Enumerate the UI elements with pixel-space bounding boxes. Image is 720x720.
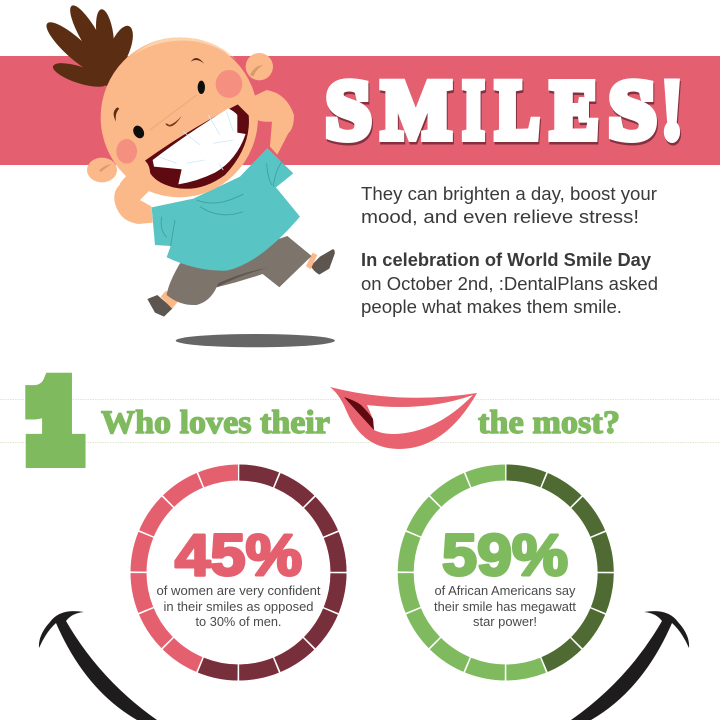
caption: in their smiles as opposed	[164, 600, 314, 614]
intro paragraph: mood, and even relieve stress!	[361, 207, 639, 227]
ring segments	[138, 472, 338, 672]
title: S	[326, 64, 371, 156]
caption	[156, 584, 321, 629]
head highlight	[133, 37, 237, 60]
ring: 59% African Americans	[406, 472, 606, 672]
ring: 45% women	[138, 472, 338, 672]
title: I	[463, 64, 484, 156]
title: E	[552, 66, 599, 158]
teeth	[153, 108, 246, 184]
title: E	[551, 64, 598, 156]
caption	[434, 584, 577, 629]
nose	[150, 95, 197, 130]
tooth lines	[158, 112, 233, 170]
hair	[41, 1, 138, 92]
intro paragraph: on October 2nd, :DentalPlans asked	[361, 274, 658, 294]
intro paragraph	[361, 184, 658, 317]
section heading	[101, 405, 620, 441]
boy character	[41, 1, 335, 347]
left ear	[87, 158, 117, 182]
mouth	[145, 102, 249, 189]
caption: star power!	[473, 615, 537, 629]
title	[326, 64, 683, 158]
shirt creases	[161, 160, 283, 246]
front sock	[161, 291, 178, 309]
eyebrows	[114, 58, 204, 122]
caption: of women are very confident	[156, 584, 321, 598]
title: I	[464, 66, 485, 158]
back foot	[311, 249, 335, 275]
percentage: 59%	[442, 523, 568, 588]
left hand	[120, 161, 150, 200]
section heading: Who loves their	[101, 405, 330, 441]
title: S	[327, 66, 372, 158]
section number: 1	[28, 365, 80, 490]
caption: their smile has megawatt	[434, 600, 577, 614]
back sock	[306, 253, 317, 269]
left arm	[114, 167, 157, 224]
big smile right end	[571, 611, 689, 720]
eyes	[198, 81, 205, 94]
right hand	[237, 90, 294, 155]
title: M	[383, 66, 452, 158]
shadow	[176, 334, 335, 347]
title: L	[496, 64, 539, 156]
header band	[0, 56, 720, 165]
caption: of African Americans say	[434, 584, 576, 598]
title: S	[610, 66, 657, 158]
title: L	[497, 66, 540, 158]
intro paragraph: people what makes them smile.	[361, 297, 622, 317]
ring segments	[406, 472, 606, 672]
title: M	[382, 64, 451, 156]
title: !	[662, 64, 682, 156]
head	[101, 37, 258, 197]
section heading: the most?	[478, 405, 620, 441]
intro paragraph: In celebration of World Smile Day	[361, 250, 651, 270]
big smile left end	[39, 611, 157, 720]
trousers	[167, 236, 312, 305]
cheeks	[216, 70, 242, 98]
shirt	[152, 148, 300, 271]
right ear	[246, 53, 273, 80]
caption: to 30% of men.	[196, 615, 282, 629]
percentage: 45%	[175, 523, 302, 588]
title: S	[609, 64, 656, 156]
icon: lips	[330, 387, 477, 449]
title: !	[663, 66, 683, 158]
intro paragraph: They can brighten a day, boost your	[361, 184, 657, 204]
front foot	[147, 295, 173, 317]
